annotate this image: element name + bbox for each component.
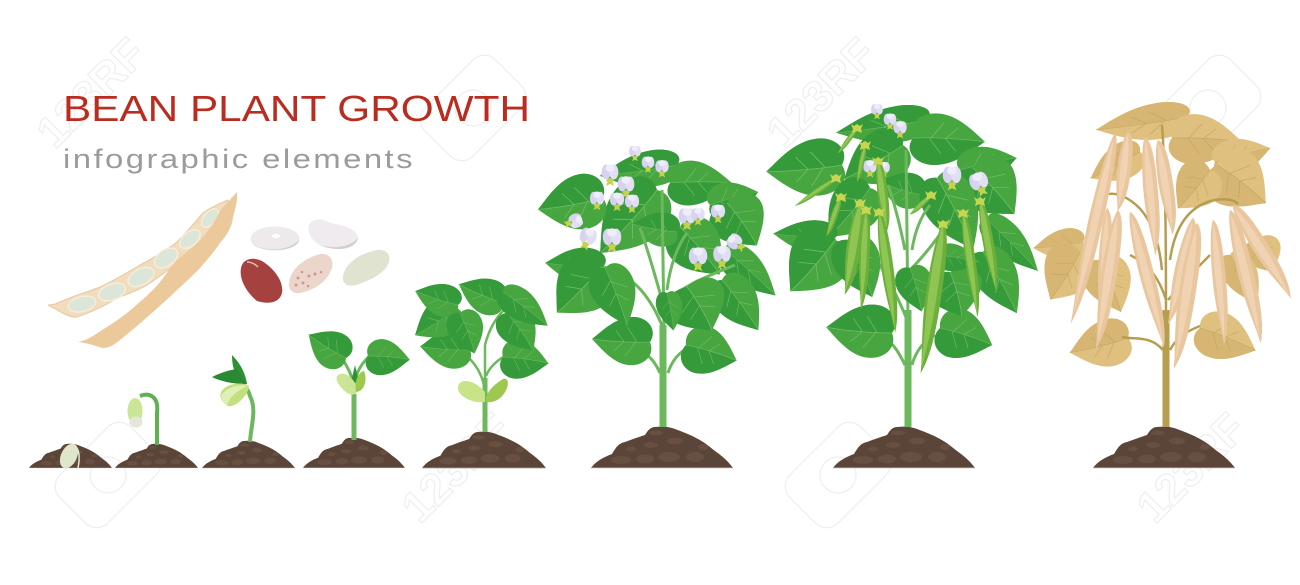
stage 7 front leaves xyxy=(767,218,1036,369)
stage 4: young plant with two leaves xyxy=(299,319,411,468)
stage 8 pods xyxy=(1066,131,1300,371)
pale green bean xyxy=(343,250,389,286)
stage 7 pods xyxy=(793,127,1003,375)
red kidney bean xyxy=(241,259,282,303)
stage 8: mature dry plant xyxy=(1028,99,1300,468)
stage 6: flowering plant xyxy=(533,146,787,468)
stage 8 back leaves xyxy=(1028,99,1289,376)
stage 7: plant with green pods xyxy=(764,102,1050,468)
open bean pod xyxy=(48,200,230,317)
stage 7 back leaves xyxy=(764,102,1050,283)
stage 6 back leaves xyxy=(533,147,787,308)
stage 7 stems xyxy=(862,150,950,365)
watermark stamps: 123RF xyxy=(27,29,155,157)
white disc bean xyxy=(250,226,300,250)
watermark stamps: 123RF xyxy=(757,29,885,157)
stage 3: seedling with first leaves xyxy=(202,355,295,468)
stage 6 flowers xyxy=(562,146,749,271)
stage 2: sprout with hooked stem xyxy=(115,395,198,468)
stage 7 pod caps xyxy=(830,124,986,229)
stage 8 stems xyxy=(1096,125,1238,350)
stage 6 stems xyxy=(603,190,735,373)
stage 6 front leaves xyxy=(536,246,776,384)
watermark stamps: 123RF xyxy=(392,404,520,532)
stage 1: germinating seed in soil xyxy=(29,441,112,471)
watermark stamps: 123RF xyxy=(1127,404,1255,532)
white kidney bean xyxy=(308,219,358,249)
stage 7 flowers xyxy=(863,104,993,199)
stage 5 leaves xyxy=(405,268,557,383)
subtitle: infographic elements xyxy=(63,144,415,174)
closed bean pod xyxy=(78,192,237,348)
stage 5: leafy plant xyxy=(405,268,557,468)
stage 5 stems xyxy=(462,300,517,432)
stage 5 cotyledons xyxy=(458,379,508,402)
speckled bean xyxy=(289,254,332,293)
title: BEAN PLANT GROWTH xyxy=(63,88,530,129)
